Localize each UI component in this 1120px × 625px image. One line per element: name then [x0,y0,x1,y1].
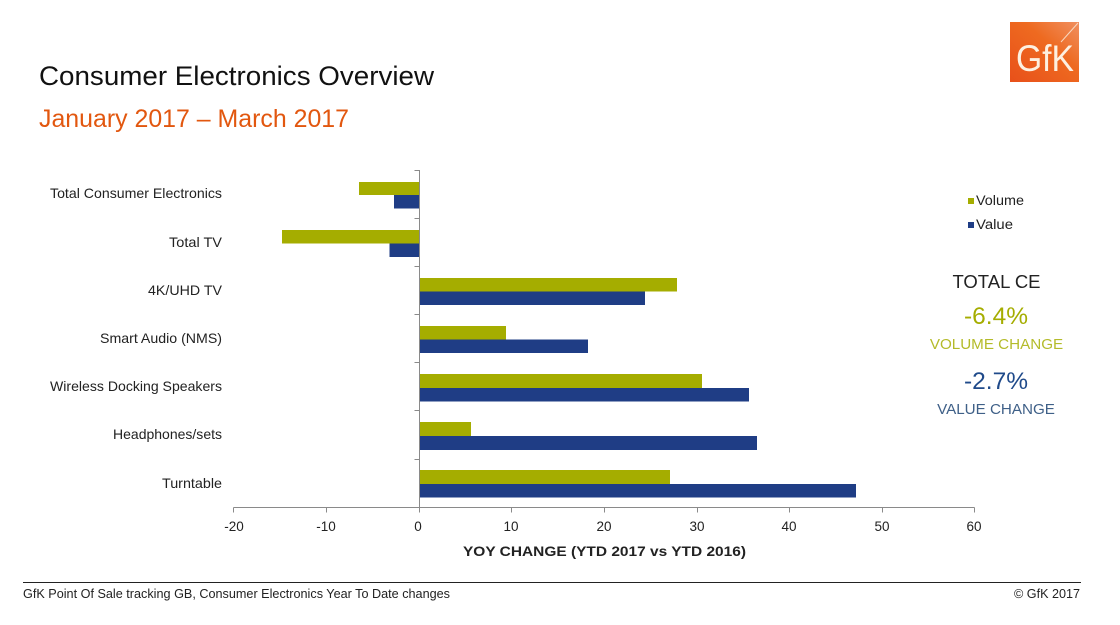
category labels: Total TV [169,235,223,250]
callout: total CE: VALUE CHANGE [937,401,1055,418]
subtitle: date range: January 2017 – March 2017 [39,106,349,133]
x axis tick labels [224,519,982,534]
callout: total CE: TOTAL CE [952,271,1041,292]
footer source note: GfK Point Of Sale tracking GB, Consumer Electronics Year To Date changes [23,587,450,601]
x axis tick labels: 20 [596,519,612,534]
x axis tick labels: 40 [781,519,797,534]
bars: value [390,195,856,498]
x axis tick labels: -20 [224,519,244,534]
callout: total CE [930,271,1063,418]
x axis title: YOY CHANGE (YTD 2017 vs YTD 2016) [463,543,746,559]
legend [968,193,1024,232]
category labels: Headphones/sets [113,427,222,442]
category labels: Total Consumer Electronics [50,186,222,201]
x axis tick labels: -10 [316,519,336,534]
icon: GfK logo: GfK [1016,38,1074,79]
x axis tick labels: 0 [414,519,422,534]
callout: total CE: -6.4% [964,303,1028,330]
x axis tick labels: 10 [503,519,519,534]
category labels: Turntable [162,476,222,491]
bar chart: YoY change by category [50,170,982,559]
callout: total CE: -2.7% [964,368,1028,395]
category labels: Smart Audio (NMS) [100,331,222,346]
title: Consumer Electronics Overview [39,61,435,91]
legend: Volume [976,193,1024,208]
category labels [50,186,223,491]
category labels: Wireless Docking Speakers [50,379,222,394]
category labels: 4K/UHD TV [148,283,223,298]
footer copyright: © GfK 2017 [1014,587,1080,601]
icon: GfK logo [1010,22,1079,82]
x axis tick labels: 30 [689,519,705,534]
x axis tick labels: 60 [966,519,982,534]
callout: total CE: VOLUME CHANGE [930,336,1063,353]
axes [234,170,974,512]
bars: volume [282,182,702,484]
x axis tick labels: 50 [874,519,890,534]
legend: Value [976,217,1013,232]
